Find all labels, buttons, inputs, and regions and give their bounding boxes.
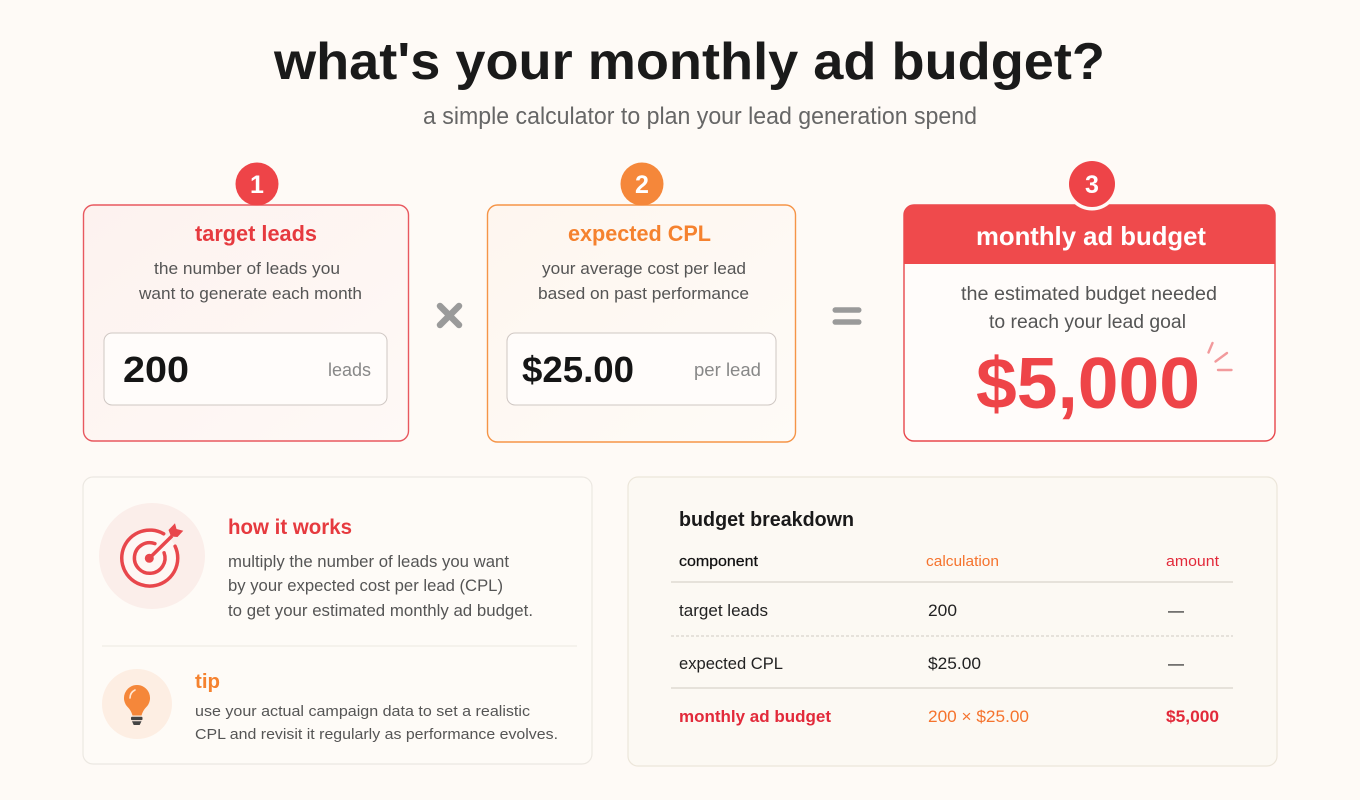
row: monthly ad budget: $5,000 [1166,707,1219,726]
table header: component [679,553,759,570]
panel: monthly ad budget result [904,158,1275,441]
how it works text: by your expected cost per lead (CPL) [228,577,503,595]
heading: expected CPL: expected CPL [568,221,711,246]
input: 200 leads: 200 [123,349,189,390]
table header [679,553,1220,570]
input: $25.00 per lead [507,333,776,405]
icon: light bulb [102,669,172,739]
panel: target leads [84,162,408,441]
description [138,259,362,303]
description [961,284,1217,333]
badge 3: 3 [1085,171,1099,199]
tip text: use your actual campaign data to set a realistic [195,703,531,720]
badge 3 [1066,158,1118,210]
row: target leads [679,601,1184,620]
row: expected CPL: expected CPL [679,654,783,673]
how it works text [228,553,533,620]
icon: equals [832,307,862,325]
row: target leads: target leads [679,601,768,620]
input: 200 leads: leads [328,360,371,380]
table header: calculation [926,553,999,570]
result header band [904,205,1275,264]
infographic canvas [82,42,1278,766]
icon: sparkle [1208,343,1232,370]
badge 2: 2 [635,171,649,199]
title: what's your monthly ad budget? [273,33,1105,91]
input: $25.00 per lead: $25.00 [522,349,634,390]
row: monthly ad budget: 200 × $25.00 [928,707,1029,726]
icon: target [99,503,205,609]
heading: tip: tip [195,671,220,693]
description: the estimated budget needed [961,284,1217,305]
badge 2 [620,162,664,206]
heading: target leads: target leads [195,221,317,246]
icon: multiply [440,306,459,325]
description: the number of leads you [154,259,340,278]
heading: how it works: how it works [228,516,352,539]
description: want to generate each month [138,284,362,303]
panel: expected CPL [488,162,796,442]
badge 1: 1 [250,171,264,199]
row: expected CPL [679,654,1184,673]
row: monthly ad budget [679,707,1219,726]
panel: budget breakdown [628,477,1277,766]
row: target leads: — [1168,601,1184,620]
description: to reach your lead goal [989,312,1186,333]
how it works text: multiply the number of leads you want [228,553,509,571]
tip text: CPL and revisit it regularly as performance evolves. [195,726,558,743]
big amount: $5,000 [976,344,1200,424]
subtitle: a simple calculator to plan your lead generation spend [423,103,977,130]
table header: amount [1166,553,1220,570]
row: expected CPL: $25.00 [928,654,981,673]
badge 1 [236,162,278,206]
description [538,259,749,303]
tip text [195,703,558,743]
panel: how it works and tip [83,477,592,764]
input: $25.00 per lead: per lead [694,360,761,380]
heading: monthly ad budget: monthly ad budget [976,221,1206,251]
row: monthly ad budget: monthly ad budget [679,707,831,726]
input: 200 leads [104,333,387,405]
row: target leads: 200 [928,601,957,620]
heading: budget breakdown: budget breakdown [679,509,854,531]
description: your average cost per lead [542,259,746,278]
row: expected CPL: — [1168,654,1184,673]
description: based on past performance [538,284,749,303]
how it works text: to get your estimated monthly ad budget. [228,602,533,620]
